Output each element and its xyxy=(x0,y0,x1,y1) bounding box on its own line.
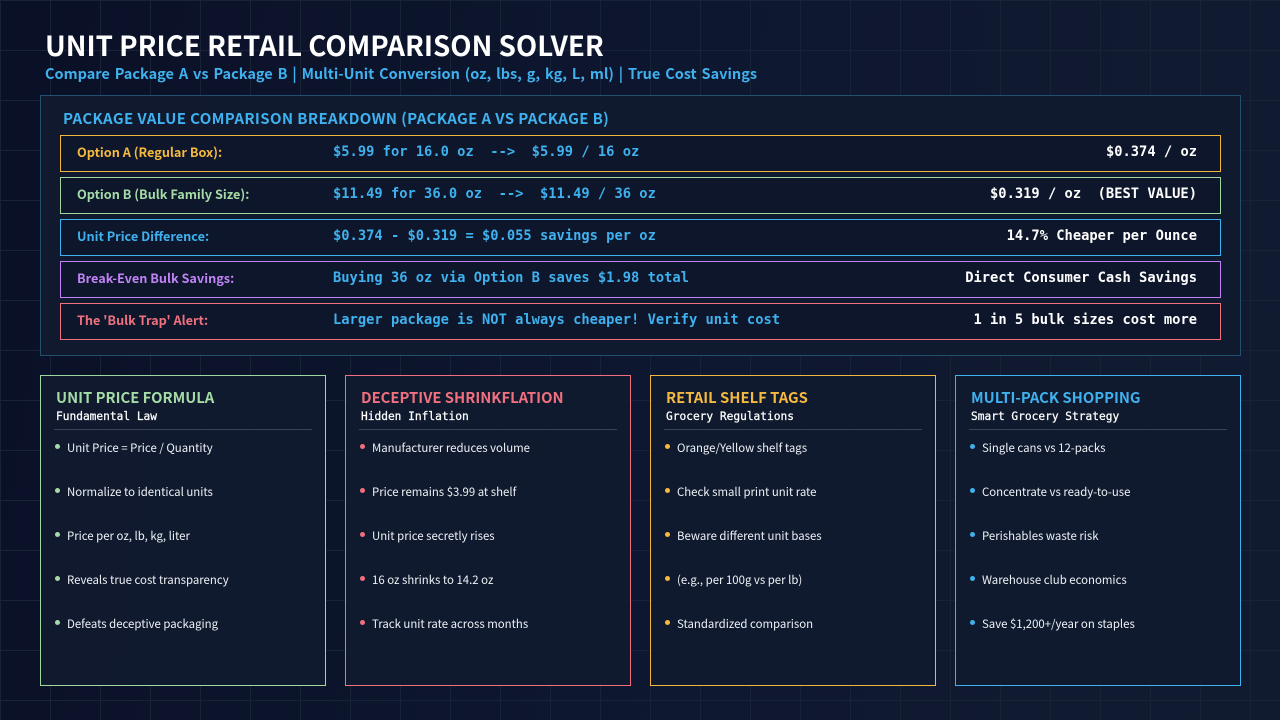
card: retail shelf tags xyxy=(650,375,936,686)
card: deceptive shrinkflation: Track unit rate across months xyxy=(372,616,528,632)
card: multi-pack shopping xyxy=(955,375,1241,686)
card: multi-pack shopping: MULTI-PACK SHOPPING xyxy=(971,387,1141,408)
card subheading: Fundamental Law xyxy=(56,410,157,423)
row: unit price difference: $0.374 - $0.319 = $0.055 savings per oz xyxy=(333,228,656,244)
card: unit price formula: Unit Price = Price / Quantity xyxy=(67,440,213,456)
row: bulk trap alert: The 'Bulk Trap' Alert: xyxy=(77,310,208,329)
card: unit price formula: Defeats deceptive packaging xyxy=(67,616,218,632)
row: option A: Option A (Regular Box): xyxy=(77,142,222,161)
row: break-even bulk savings: Direct Consumer Cash Savings xyxy=(965,270,1197,286)
card: unit price formula: Price per oz, lb, kg, liter xyxy=(67,528,190,544)
row: option A: $5.99 for 16.0 oz --> $5.99 / 16 oz xyxy=(333,144,639,160)
card: multi-pack shopping: Save $1,200+/year on staples xyxy=(982,616,1135,632)
card: retail shelf tags: Orange/Yellow shelf tags xyxy=(677,440,807,456)
card: unit price formula: Reveals true cost transparency xyxy=(67,572,229,588)
card: deceptive shrinkflation: Manufacturer reduces volume xyxy=(372,440,530,456)
row: unit price difference: Unit Price Difference: xyxy=(77,226,209,245)
card: unit price formula xyxy=(40,375,326,686)
card: retail shelf tags: Beware different unit bases xyxy=(677,528,822,544)
row: option B: $11.49 for 36.0 oz --> $11.49 / 36 oz xyxy=(333,186,656,202)
card: retail shelf tags: Check small print unit rate xyxy=(677,484,816,500)
card: deceptive shrinkflation: Unit price secretly rises xyxy=(372,528,495,544)
card: retail shelf tags: (e.g., per 100g vs per lb) xyxy=(677,572,802,588)
row: option A: $0.374 / oz xyxy=(1106,144,1197,160)
row: break-even bulk savings xyxy=(60,261,1221,298)
card subheading: Grocery Regulations xyxy=(666,410,794,423)
card: deceptive shrinkflation: 16 oz shrinks to 14.2 oz xyxy=(372,572,493,588)
subtitle: Compare Package A vs Package B | Multi-Unit Conversion (oz, lbs, g, kg, L, ml) | True Cost Savings xyxy=(45,63,757,84)
row: bulk trap alert xyxy=(60,303,1221,340)
card: retail shelf tags: Standardized comparison xyxy=(677,616,813,632)
card subheading: Hidden Inflation xyxy=(361,410,469,423)
card: multi-pack shopping: Single cans vs 12-packs xyxy=(982,440,1105,456)
row: break-even bulk savings: Break-Even Bulk Savings: xyxy=(77,268,234,287)
row: option B xyxy=(60,177,1221,214)
card subheading: Smart Grocery Strategy xyxy=(971,410,1119,423)
row: option B: Option B (Bulk Family Size): xyxy=(77,184,249,203)
row: unit price difference xyxy=(60,219,1221,256)
card: retail shelf tags: RETAIL SHELF TAGS xyxy=(666,387,808,408)
row: break-even bulk savings: Buying 36 oz via Option B saves $1.98 total xyxy=(333,270,689,286)
card: multi-pack shopping: Warehouse club economics xyxy=(982,572,1127,588)
card: deceptive shrinkflation xyxy=(345,375,631,686)
card: unit price formula: Normalize to identical units xyxy=(67,484,213,500)
row: option A xyxy=(60,135,1221,172)
card: unit price formula: UNIT PRICE FORMULA xyxy=(56,387,214,408)
row: bulk trap alert: Larger package is NOT always cheaper! Verify unit cost xyxy=(333,312,780,328)
panel heading: PACKAGE VALUE COMPARISON BREAKDOWN (PACKAGE A VS PACKAGE B) xyxy=(63,108,609,129)
row: bulk trap alert: 1 in 5 bulk sizes cost more xyxy=(973,312,1197,328)
title: UNIT PRICE RETAIL COMPARISON SOLVER xyxy=(45,24,604,64)
card: multi-pack shopping: Perishables waste risk xyxy=(982,528,1099,544)
card: multi-pack shopping: Concentrate vs ready-to-use xyxy=(982,484,1130,500)
row: unit price difference: 14.7% Cheaper per Ounce xyxy=(1007,228,1197,244)
card: deceptive shrinkflation: DECEPTIVE SHRINKFLATION xyxy=(361,387,564,408)
row: option B: $0.319 / oz (BEST VALUE) xyxy=(990,186,1197,202)
card: deceptive shrinkflation: Price remains $3.99 at shelf xyxy=(372,484,516,500)
panel: package value comparison xyxy=(40,95,1241,356)
